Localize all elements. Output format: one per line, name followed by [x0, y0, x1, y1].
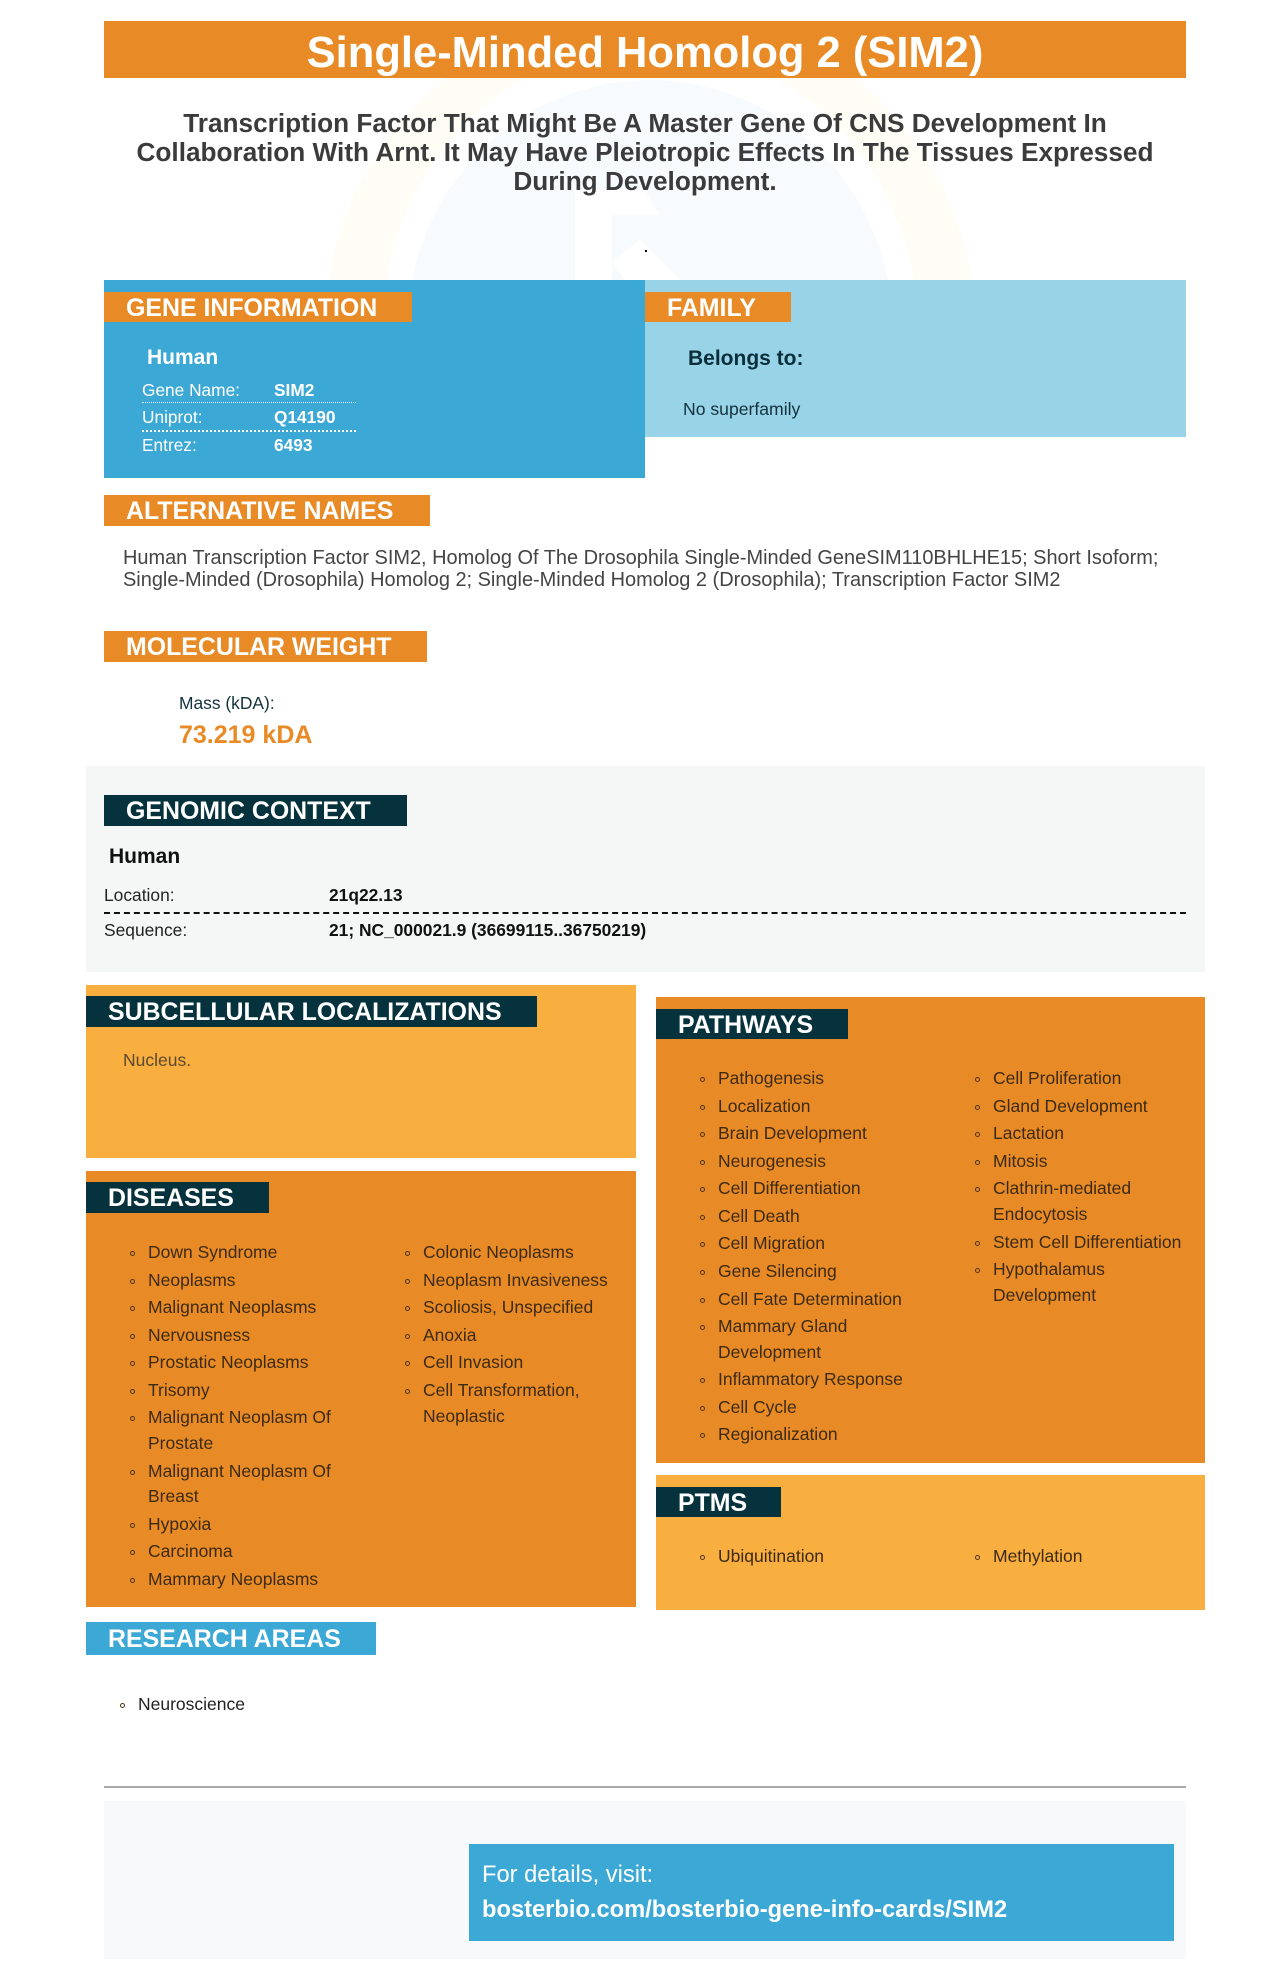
- heading: molecular weight: MOLECULAR WEIGHT: [126, 633, 391, 661]
- pathway list column 1: Inflammatory Response: [718, 1369, 903, 1389]
- heading: gene information: GENE INFORMATION: [126, 294, 377, 322]
- disease list column 1: Mammary Neoplasms: [148, 1569, 318, 1589]
- heading: diseases: [86, 1182, 269, 1213]
- pathway list column 2: Stem Cell Differentiation: [993, 1232, 1181, 1252]
- pathway list column 1: Localization: [718, 1096, 810, 1116]
- heading: family: FAMILY: [667, 294, 756, 322]
- mass label: Mass (kDA):: [179, 693, 275, 713]
- heading: research areas: [86, 1622, 376, 1655]
- pathway list column 2: Hypothalamus: [993, 1259, 1105, 1279]
- location row: Location:: [104, 885, 175, 905]
- pathway list column 2: Mitosis: [993, 1151, 1047, 1171]
- pathway list column 1: Development: [718, 1342, 821, 1362]
- pathway list column 1: Cell Death: [718, 1206, 800, 1226]
- heading: diseases: DISEASES: [108, 1184, 234, 1212]
- pathway list column 1: Neurogenesis: [718, 1151, 826, 1171]
- pathway list column 1: Brain Development: [718, 1123, 867, 1143]
- pathway list column 1: Cell Cycle: [718, 1397, 797, 1417]
- heading: research areas: RESEARCH AREAS: [108, 1625, 341, 1653]
- heading: alternative names: ALTERNATIVE NAMES: [126, 497, 393, 525]
- heading: genomic context: GENOMIC CONTEXT: [126, 797, 371, 825]
- subtitle: Collaboration With Arnt. It May Have Pleiotropic Effects In The Tissues Expressed: [137, 137, 1153, 167]
- disease list column 2: Cell Transformation,: [423, 1380, 580, 1400]
- panel: genomic context: [86, 766, 1205, 972]
- sequence row: 21; NC_000021.9 (36699115..36750219): [329, 920, 646, 940]
- sequence row: [104, 920, 646, 940]
- subtitle: During Development.: [513, 166, 777, 196]
- mass value: 73.219 kDA: [179, 721, 312, 749]
- disease list column 1: Malignant Neoplasms: [148, 1297, 316, 1317]
- pathway list column 2: [975, 1068, 1181, 1305]
- disease list column 1: Prostatic Neoplasms: [148, 1352, 308, 1372]
- belongs to label: Belongs to:: [688, 347, 804, 370]
- panel: pathways: [656, 997, 1205, 1463]
- gene details table: SIM2: [274, 380, 314, 400]
- gene details table: Q14190: [274, 407, 336, 427]
- sequence row: Sequence:: [104, 920, 187, 940]
- pathway list column 1: Pathogenesis: [718, 1068, 824, 1088]
- pathway list column 2: Development: [993, 1285, 1096, 1305]
- panel: family: [645, 280, 1186, 437]
- pathway list column 2: Cell Proliferation: [993, 1068, 1121, 1088]
- research areas list: Neuroscience: [138, 1694, 245, 1714]
- species label: Human: [109, 845, 180, 868]
- heading: pathways: [656, 1009, 848, 1039]
- heading: PTMs: [656, 1487, 781, 1517]
- disease list column 1: Malignant Neoplasm Of: [148, 1461, 331, 1481]
- heading: pathways: PATHWAYS: [678, 1011, 813, 1039]
- heading: subcellular localizations: SUBCELLULAR LOCALIZATIONS: [108, 998, 502, 1026]
- disease list column 1: Neoplasms: [148, 1270, 236, 1290]
- watermark logo: [329, 78, 971, 280]
- stray dot: .: [644, 239, 648, 255]
- pathway list column 2: Clathrin-mediated: [993, 1178, 1131, 1198]
- heading: family: [645, 292, 791, 322]
- disease list column 2: [405, 1242, 608, 1426]
- PTM list column 2: Methylation: [993, 1546, 1082, 1566]
- callout url: bosterbio.com/bosterbio-gene-info-cards/SIM2: [482, 1897, 1007, 1923]
- panel: subcellular localizations: [86, 985, 636, 1158]
- panel: PTMs: [656, 1475, 1205, 1610]
- gene details table: Uniprot:: [142, 407, 203, 427]
- pathway list column 1: [700, 1068, 903, 1444]
- gene details table: Gene Name:: [142, 380, 240, 400]
- pathway list column 2: Lactation: [993, 1123, 1064, 1143]
- title: Single-Minded Homolog 2 (SIM2): [307, 29, 983, 77]
- pathway list column 1: Mammary Gland: [718, 1316, 847, 1336]
- location row: 21q22.13: [329, 885, 402, 905]
- pathway list column 1: Regionalization: [718, 1424, 838, 1444]
- family value: No superfamily: [683, 399, 800, 419]
- gene details table: Entrez:: [142, 435, 197, 455]
- disease list column 1: Prostate: [148, 1433, 213, 1453]
- disease list column 1: Down Syndrome: [148, 1242, 277, 1262]
- footer panel: [104, 1801, 1186, 1959]
- gene details table: 6493: [274, 435, 312, 455]
- callout label: For details, visit:: [482, 1862, 653, 1888]
- disease list column 1: Malignant Neoplasm Of: [148, 1407, 331, 1427]
- location row: [104, 885, 402, 905]
- disease list column 2: Neoplasm Invasiveness: [423, 1270, 608, 1290]
- pathway list column 1: Cell Migration: [718, 1233, 825, 1253]
- alternative names text: [123, 547, 1158, 591]
- disease list column 2: Anoxia: [423, 1325, 477, 1345]
- alternative names text: Single-Minded (Drosophila) Homolog 2; Single-Minded Homolog 2 (Drosophila); Transcription Factor SIM2: [123, 569, 1060, 591]
- subtitle: [137, 108, 1153, 196]
- PTM list column 1: Ubiquitination: [718, 1546, 824, 1566]
- title: [104, 21, 1186, 78]
- disease list column 1: Hypoxia: [148, 1514, 211, 1534]
- disease list column 2: Colonic Neoplasms: [423, 1242, 574, 1262]
- pathway list column 2: Gland Development: [993, 1096, 1148, 1116]
- pathway list column 1: Cell Fate Determination: [718, 1288, 902, 1308]
- disease list column 2: Neoplastic: [423, 1406, 505, 1426]
- disease list column 1: Breast: [148, 1486, 199, 1506]
- pathway list column 2: Endocytosis: [993, 1204, 1087, 1224]
- pathway list column 1: Gene Silencing: [718, 1261, 837, 1281]
- disease list column 1: Trisomy: [148, 1380, 210, 1400]
- panel: diseases: [86, 1171, 636, 1607]
- panel: gene information: [104, 280, 645, 478]
- callout: details link: [469, 1844, 1174, 1941]
- disease list column 2: Scoliosis, Unspecified: [423, 1297, 593, 1317]
- heading: PTMs: PTMS: [678, 1489, 747, 1517]
- disease list column 1: [130, 1242, 331, 1589]
- disease list column 1: Nervousness: [148, 1325, 250, 1345]
- gene details table: [142, 380, 356, 455]
- disease list column 1: Carcinoma: [148, 1541, 233, 1561]
- localization text: Nucleus.: [123, 1050, 191, 1070]
- pathway list column 1: Cell Differentiation: [718, 1178, 861, 1198]
- subtitle: Transcription Factor That Might Be A Master Gene Of CNS Development In: [183, 108, 1107, 138]
- species label: Human: [147, 346, 218, 369]
- alternative names text: Human Transcription Factor SIM2, Homolog Of The Drosophila Single-Minded GeneSIM110BHLHE15; Short Isoform;: [123, 547, 1158, 569]
- disease list column 2: Cell Invasion: [423, 1352, 523, 1372]
